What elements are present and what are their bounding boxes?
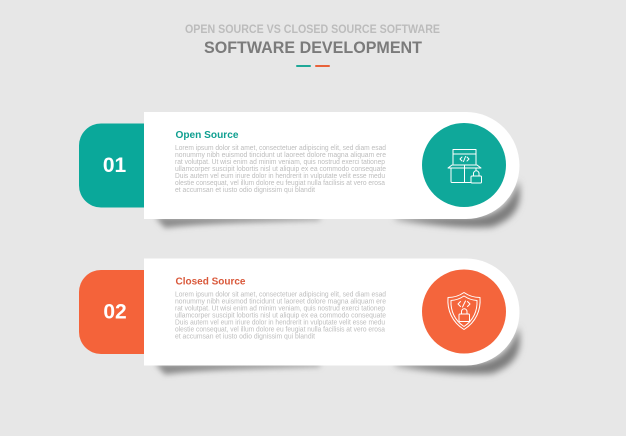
card shadow — [155, 180, 520, 228]
number: 01 — [103, 154, 126, 177]
heading: Closed Source — [176, 276, 246, 288]
subtitle: OPEN SOURCE VS CLOSED SOURCE SOFTWARE — [185, 24, 440, 36]
main title: SOFTWARE DEVELOPMENT — [204, 38, 423, 57]
body text: olestie consequat, vel illum dolore eu feugiat nulla facilisis at vero erosa — [175, 326, 385, 334]
body text — [175, 145, 386, 194]
body text: rat volutpat. Ut wisi enim ad minim veniam, quis nostrud exerci tationep — [175, 306, 385, 312]
body text: Duis autem vel eum iriure dolor in hendrerit in vulputate velit esse medu — [175, 320, 385, 326]
icon: shield with code and lock — [448, 292, 480, 330]
body text: rat volutpat. Ut wisi enim ad minim veniam, quis nostrud exerci tationep — [175, 159, 385, 166]
body text: ullamcorper suscipit lobortis nisl ut aliquip ex ea commodo consequate — [175, 312, 386, 320]
card shadow — [155, 326, 520, 374]
body text — [175, 292, 386, 340]
body text: et accumsan et iusto odio dignissim qui blandit — [175, 334, 315, 340]
title block — [185, 24, 440, 67]
body text: nonummy nibh euismod tincidunt ut laoreet dolore magna aliquam ere — [175, 152, 386, 159]
icon circle — [422, 270, 506, 354]
body text: Lorem ipsum dolor sit amet, consectetuer adipiscing elit, sed diam esad — [175, 145, 386, 152]
number badge — [79, 270, 146, 354]
body text: Duis autem vel eum iriure dolor in hendrerit in vulputate velit esse medu — [175, 173, 385, 180]
white card — [144, 112, 519, 219]
number: 02 — [103, 300, 127, 324]
icon circle — [422, 123, 506, 207]
title accent dashes — [296, 65, 330, 67]
number badge — [79, 124, 146, 208]
body text: et accumsan et iusto odio dignissim qui blandit — [175, 187, 315, 194]
heading: Open Source — [176, 130, 239, 141]
body text: ullamcorper suscipit lobortis nisl ut aliquip ex ea commodo consequate — [175, 166, 386, 173]
body text: Lorem ipsum dolor sit amet, consectetuer adipiscing elit, sed diam esad — [175, 292, 386, 298]
icon: open box with code window and lock — [448, 150, 482, 183]
panel: closed source — [79, 258, 520, 374]
body text: nonummy nibh euismod tincidunt ut laoreet dolore magna aliquam ere — [175, 298, 386, 306]
body text: olestie consequat, vel illum dolore eu feugiat nulla facilisis at vero erosa — [175, 180, 385, 187]
white card — [144, 258, 520, 366]
panel: open source — [79, 112, 520, 228]
